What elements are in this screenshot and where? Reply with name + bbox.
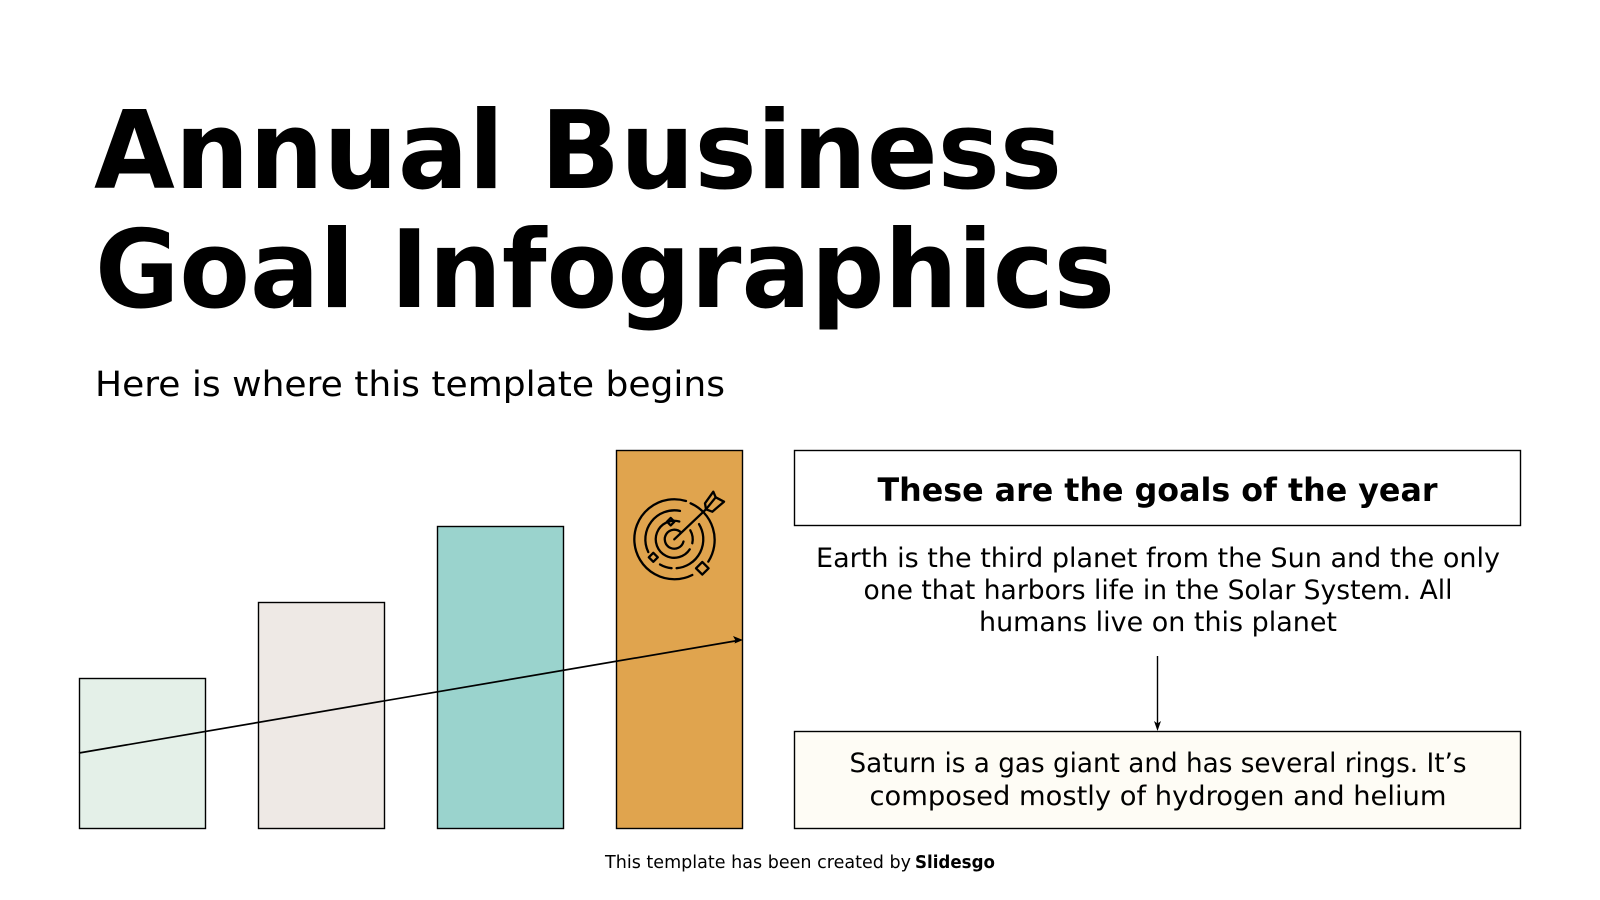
footer credit: This template has been created by bbox=[604, 852, 911, 873]
heading box: These are the goals of the year bbox=[878, 471, 1438, 509]
callout: Saturn bbox=[794, 732, 1520, 828]
heading box bbox=[794, 450, 1520, 526]
bar chart bbox=[80, 450, 742, 828]
text block: Earth description: humans live on this planet bbox=[979, 607, 1337, 638]
subtitle: Here is where this template begins bbox=[95, 365, 725, 405]
title: Annual Business bbox=[94, 89, 1062, 214]
text block: Earth description: Earth is the third planet from the Sun and the only bbox=[816, 543, 1500, 574]
title bbox=[94, 89, 1115, 333]
arrow: down to callout bbox=[1154, 656, 1161, 731]
text block: Earth description: one that harbors life in the Solar System. All bbox=[864, 575, 1452, 606]
arrow: growth trend bbox=[79, 636, 743, 753]
callout: Saturn: Saturn is a gas giant and has several rings. It’s bbox=[850, 748, 1466, 779]
icon: target with arrow bbox=[634, 492, 724, 579]
callout: Saturn: composed mostly of hydrogen and helium bbox=[870, 781, 1446, 812]
text block: Earth description bbox=[816, 543, 1500, 638]
title: Goal Infographics bbox=[95, 208, 1115, 333]
footer credit: Slidesgo bbox=[915, 852, 995, 873]
